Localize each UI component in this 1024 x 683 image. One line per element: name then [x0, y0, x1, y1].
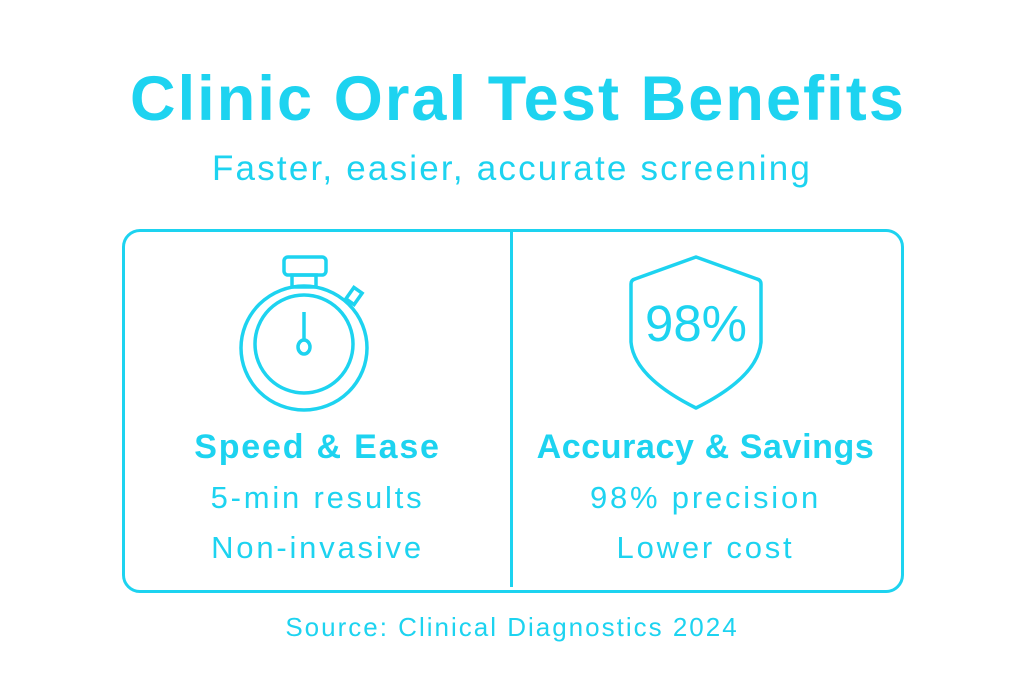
- icon: shield 98%: 98%: [645, 295, 747, 352]
- text: lower cost: Lower cost: [617, 530, 794, 565]
- source: Source: Clinical Diagnostics 2024: [285, 612, 739, 642]
- title: Clinic Oral Test Benefits: [130, 64, 906, 134]
- panel frame: [122, 229, 904, 593]
- text: non-invasive: Non-invasive: [211, 530, 424, 565]
- icon: stopwatch: [239, 255, 369, 412]
- divider: [510, 232, 513, 587]
- text: 98% precision: 98% precision: [590, 480, 821, 515]
- panel: accuracy & savings: [537, 255, 874, 565]
- heading: Speed & Ease: [194, 428, 441, 466]
- heading: Accuracy & Savings: [537, 428, 874, 466]
- subtitle: Faster, easier, accurate screening: [212, 149, 812, 188]
- panel: speed & ease: [194, 255, 441, 565]
- icon: shield 98%: [629, 255, 763, 410]
- text: 5-min results: 5-min results: [211, 480, 424, 515]
